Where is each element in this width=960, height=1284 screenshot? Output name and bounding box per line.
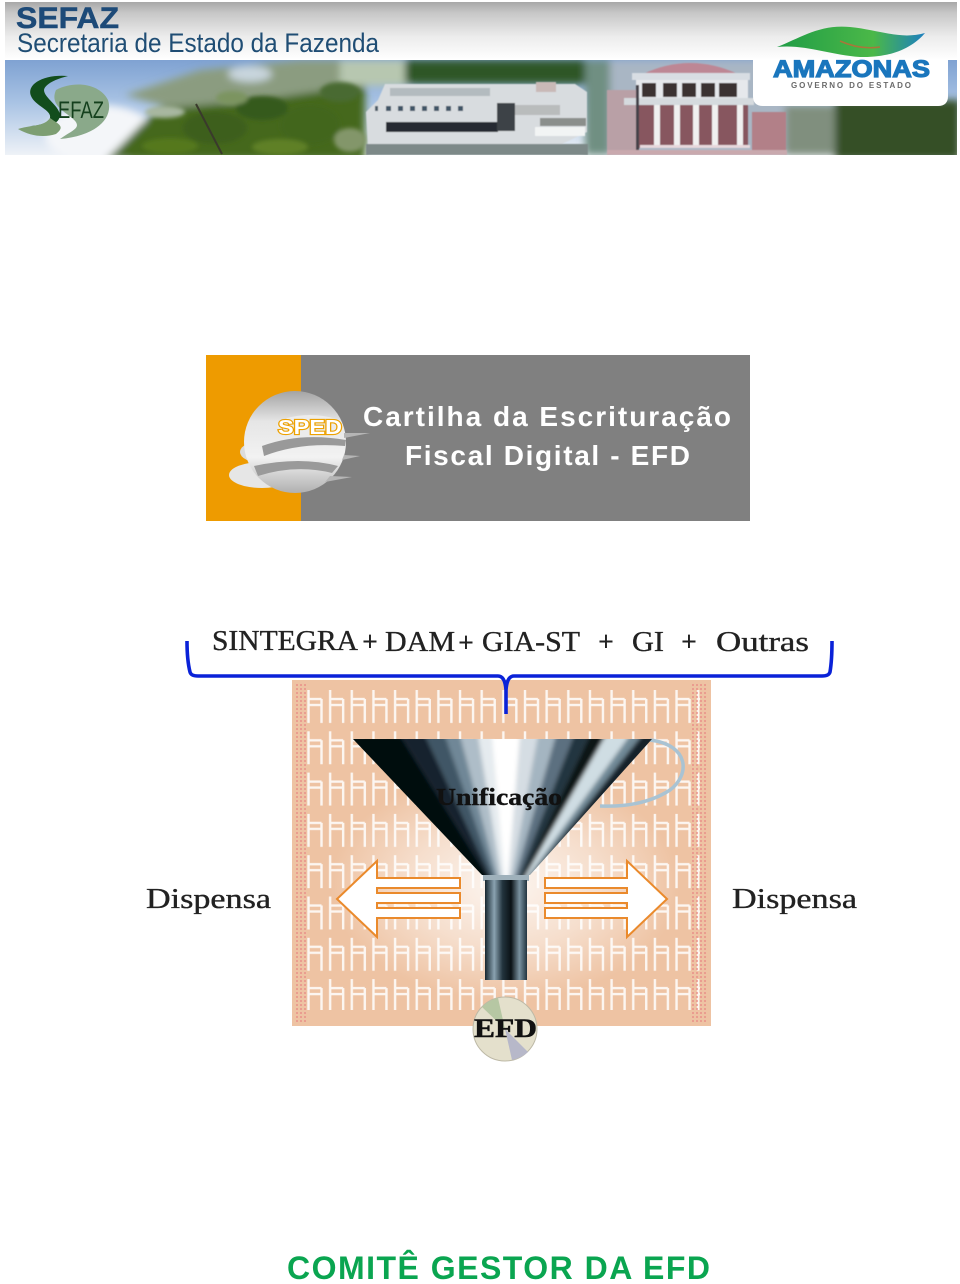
DAM label: DAM xyxy=(385,627,455,658)
funnel collar xyxy=(483,875,529,881)
header banner xyxy=(5,2,960,165)
GIA-ST label: GIA-ST xyxy=(482,627,580,658)
SEFAZ logo: EFAZ xyxy=(58,97,104,124)
EFD disc xyxy=(473,997,537,1061)
right arrow xyxy=(545,861,667,937)
tree trunk xyxy=(196,104,222,154)
Secretaria subtitle: Secretaria de Estado da Fazenda xyxy=(17,28,380,58)
icon: SPED globe: SPED xyxy=(278,417,342,439)
boat xyxy=(366,82,588,155)
funnel cone xyxy=(353,739,652,875)
funnel tube xyxy=(485,880,527,980)
Outras label: Outras xyxy=(716,627,809,658)
SINTEGRA label: SINTEGRA xyxy=(212,626,359,657)
SEFAZ title: SEFAZ xyxy=(16,2,119,35)
plus sign: + xyxy=(681,627,697,658)
Dispensa left label: Dispensa xyxy=(146,884,272,915)
blue brace xyxy=(187,641,832,714)
icon: SPED globe xyxy=(229,391,370,493)
title panel xyxy=(206,355,750,521)
funnel diagram xyxy=(146,626,858,1061)
panel title line 2: Fiscal Digital - EFD xyxy=(405,440,690,471)
tree foliage blotches xyxy=(142,82,366,155)
EFD disc: EFD xyxy=(474,1014,537,1043)
plus sign: + xyxy=(458,628,474,659)
panel grey background xyxy=(206,355,750,521)
Dispensa right label: Dispensa xyxy=(732,884,858,915)
Unificação label: Unificação xyxy=(436,785,562,811)
plus sign: + xyxy=(362,627,378,658)
GI label: GI xyxy=(632,627,664,658)
Amazonas government logo xyxy=(753,27,948,106)
plus sign: + xyxy=(598,627,614,658)
funnel handle xyxy=(600,740,683,806)
left arrow xyxy=(337,861,460,937)
Amazonas government logo: GOVERNO DO ESTADO xyxy=(791,81,911,90)
funnel xyxy=(340,735,683,980)
panel orange block xyxy=(206,355,301,521)
banner photo collage xyxy=(5,60,960,165)
peach patterned background xyxy=(292,680,711,1026)
banner grey gradient strip xyxy=(5,2,957,60)
Amazonas government logo: AMAZONAS xyxy=(773,56,930,83)
panel title line 1: Cartilha da Escrituração xyxy=(363,401,731,432)
SEFAZ logo xyxy=(18,76,109,139)
theatre building xyxy=(607,63,787,155)
